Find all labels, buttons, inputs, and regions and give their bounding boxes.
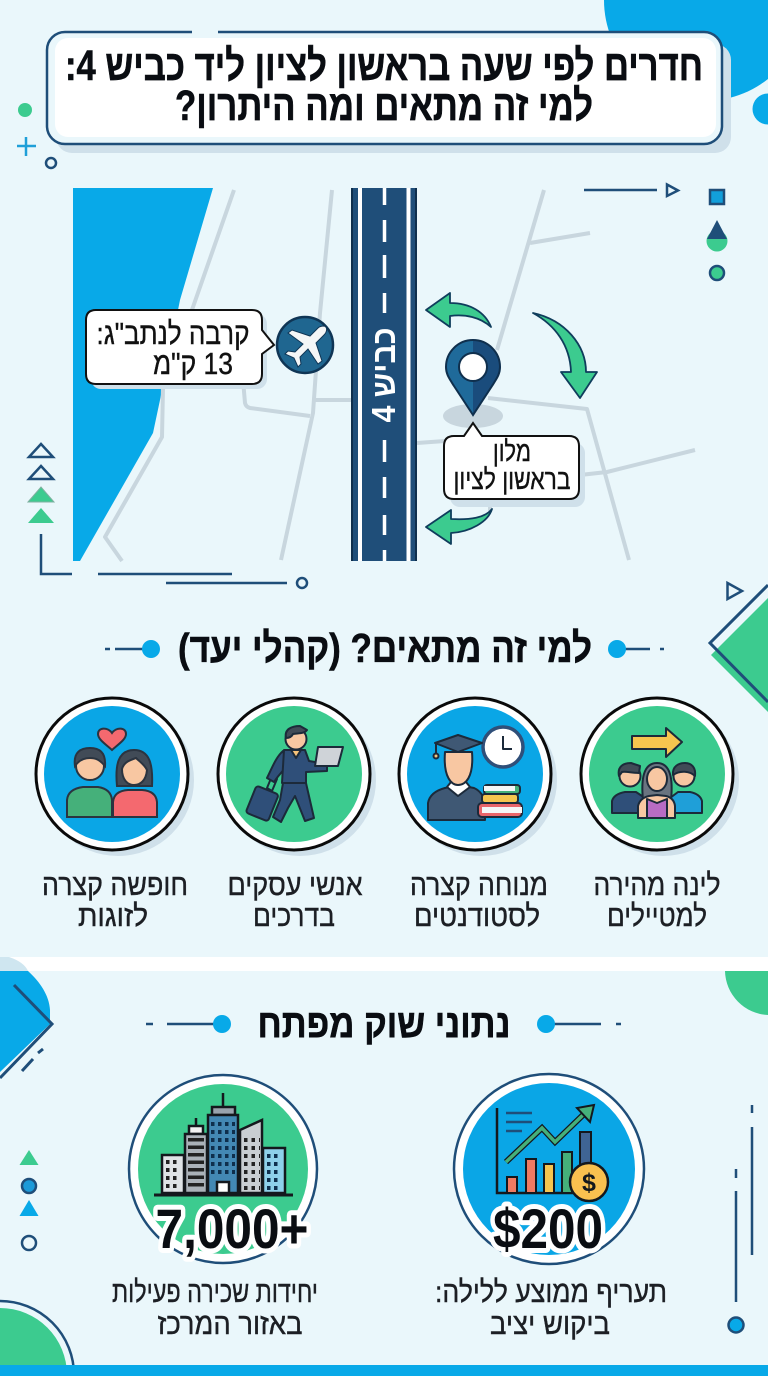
decoration: top right of map marks [584,184,728,280]
audience: couples [36,698,194,856]
arrow: curved right [533,313,597,398]
heading: target audience: למי זה מתאים? (קהלי יעד) [178,625,592,671]
map: streets [105,190,695,561]
audience: travelers [581,698,739,856]
label: travelers: לינה מהירה [594,869,720,902]
label: business travelers: בדרכים [253,900,335,933]
title text [65,42,703,130]
decoration: right green diamond [710,583,768,712]
icon: group with arrow [612,728,702,818]
map panel [73,188,695,561]
bottom bar [0,1365,768,1376]
callout: hotel [444,423,585,507]
decoration: top right blue shapes [604,0,768,124]
icon: city skyline [154,1093,293,1195]
stat label: average nightly rate [435,1276,667,1341]
icon: airplane [277,317,333,373]
stat: average nightly rate [454,1074,644,1264]
callout: hotel: בראשון לציון [454,464,570,495]
label: travelers [594,869,720,933]
map: sea [73,188,213,561]
callout: hotel: מלון [493,436,531,467]
title text: למי זה מתאים ומה היתרון? [175,82,593,130]
audience: business travelers [218,698,376,856]
stat label: average nightly rate: ביקוש יציב [490,1308,610,1341]
label: students: לסטודנטים [414,900,540,933]
arrow: to highway north [426,293,491,327]
decoration: left blue diamond [0,957,52,1078]
stat label: rental units: באזור המרכז [158,1308,302,1341]
arrow: to highway south [426,509,492,544]
label: students [410,869,548,933]
callout: airport proximity: קרבה לנתב"ג: [96,316,250,351]
icon: growth chart with coin [497,1105,608,1201]
decoration: bottom left green circle [0,1301,74,1376]
decoration: left triangles and corner line [28,444,307,588]
stat value: $200 [493,1197,603,1260]
decoration: top left marks [17,103,56,168]
label: students: מנוחה קצרה [410,869,548,902]
callout: airport proximity: 13 ק"מ [153,346,233,381]
divider band [0,957,768,971]
icon: student with clock and books [428,727,523,820]
map: highway 4 [351,188,417,561]
icon: couple [67,729,157,817]
stat label: average nightly rate: תעריף ממוצע ללילה: [435,1276,667,1309]
decoration: right green quarter circle [725,971,768,1015]
label: couples [42,869,188,933]
stat label: rental units [112,1276,318,1341]
icon: location pin [443,340,503,428]
heading: key market data: נתוני שוק מפתח [258,1002,510,1046]
stat: rental units [129,1075,317,1263]
highway label: כביש 4 [365,328,402,422]
label: couples: חופשה קצרה [42,869,188,902]
decoration: left bottom markers [20,1150,38,1250]
label: business travelers [228,869,363,933]
title panel [47,28,731,153]
audience: students [399,698,557,856]
label: couples: לזוגות [78,900,148,933]
stat value: 7,000+ [156,1197,308,1260]
coin symbol: $ [582,1169,596,1197]
decoration: right bottom lines [728,1105,752,1332]
label: business travelers: אנשי עסקים [228,869,363,902]
label: travelers: למטיילים [607,900,707,933]
callout: airport proximity [86,310,274,389]
icon: businessman with suitcase [246,726,343,822]
stat label: rental units: יחידות שכירה פעילות [112,1276,318,1309]
heading: key market data [146,1002,621,1046]
